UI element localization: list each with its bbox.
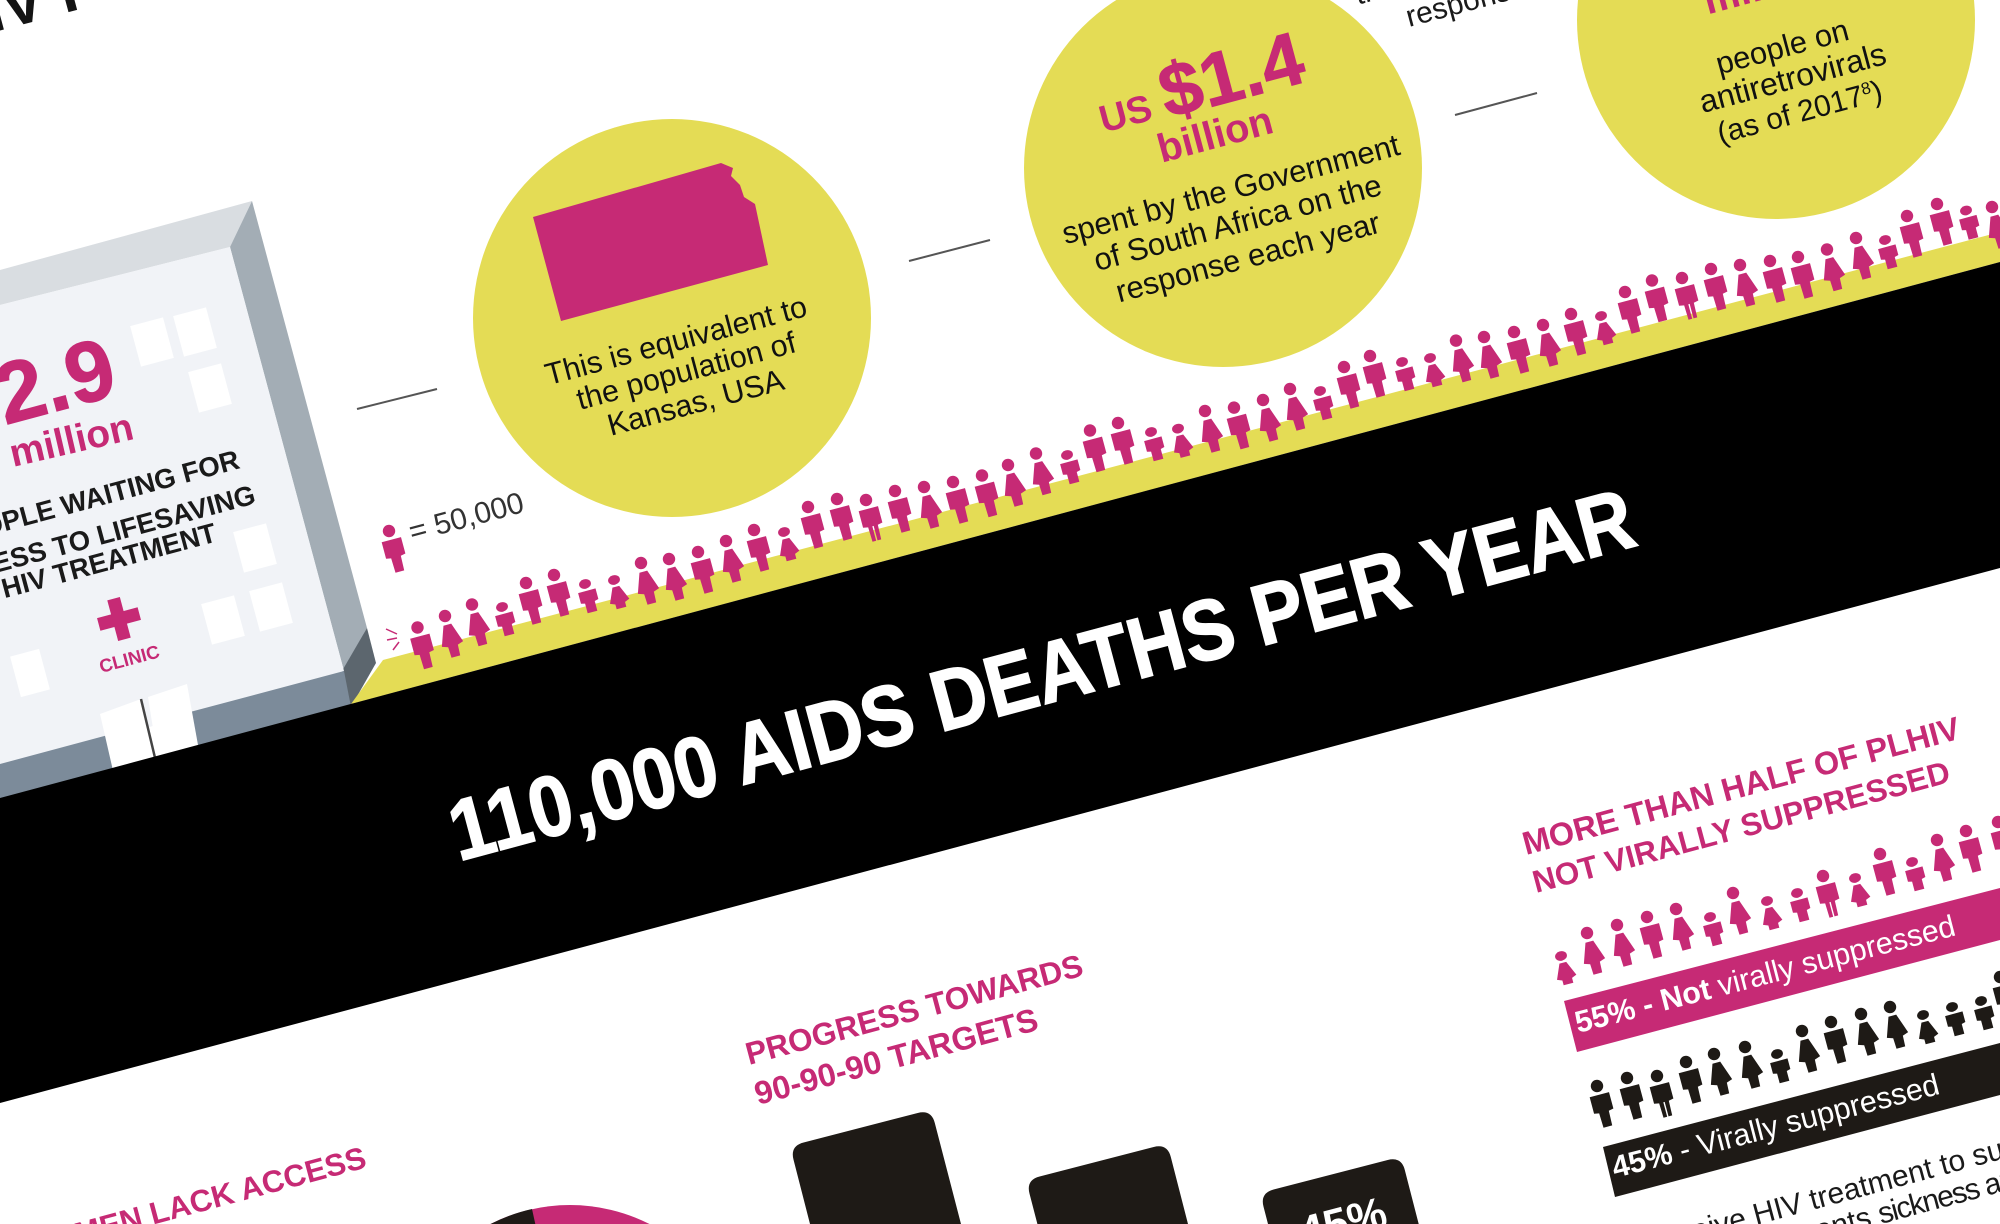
currency prefix: US xyxy=(1095,87,1157,141)
connector dashes xyxy=(357,93,1537,409)
people row: yearly deaths xyxy=(406,195,2000,671)
illustration: clinic building xyxy=(0,201,376,802)
clinic text: HIV TREATMENT xyxy=(0,517,220,604)
band title: 110,000 AIDS DEATHS PER YEAR xyxy=(439,470,1645,880)
heading: viral suppression: NOT VIRALLY SUPPRESSED xyxy=(1528,754,1954,900)
people row: not suppressed xyxy=(1550,813,2000,987)
yellow ground strip xyxy=(351,232,2000,704)
spending caption xyxy=(1058,127,1422,319)
icon: Kansas map xyxy=(533,163,768,321)
antiretrovirals caption: (as of 2017 xyxy=(1714,80,1867,150)
black band xyxy=(0,262,2000,1103)
legend: one figure equals 50,000 xyxy=(378,486,527,574)
antiretrovirals caption: antiretrovirals xyxy=(1695,35,1890,120)
Kansas caption xyxy=(541,289,827,455)
antiretrovirals caption: ) xyxy=(1868,75,1886,109)
icon: medical cross xyxy=(93,593,145,645)
spending caption: of South Africa on the xyxy=(1090,167,1385,278)
bar: 55 percent not suppressed: 55% - Not virally suppressed xyxy=(1571,909,1959,1040)
spending caption: response each year xyxy=(1112,205,1384,309)
start burst marks xyxy=(386,629,399,650)
heading: viral suppression: MORE THAN HALF OF PLHIV xyxy=(1518,710,1964,862)
heading: progress towards targets: PROGRESS TOWARDS xyxy=(741,947,1087,1072)
Kansas caption: Kansas, USA xyxy=(604,363,788,443)
legend: one figure equals 50,000: = 50,000 xyxy=(405,486,527,549)
antiretrovirals caption: people on xyxy=(1712,12,1852,81)
clinic sign: CLINIC xyxy=(97,641,162,677)
stat label: million: million xyxy=(5,406,137,476)
people row: suppressed xyxy=(1586,968,2000,1129)
circle: people on antiretrovirals xyxy=(1577,0,1975,219)
bar: 45 percent suppressed xyxy=(1603,1043,2000,1197)
heading: progress towards targets: 90-90-90 TARGETS xyxy=(750,1001,1042,1112)
unit: billion xyxy=(1153,98,1278,171)
Kansas caption: This is equivalent to xyxy=(541,289,811,392)
spending caption: spent by the Government xyxy=(1058,127,1404,251)
bar: 45 percent suppressed: 45% - Virally suppressed xyxy=(1608,1068,1943,1185)
antiretrovirals caption xyxy=(1687,5,1899,153)
antiretrovirals caption: 8 xyxy=(1859,78,1873,99)
pie chart xyxy=(490,1205,650,1224)
amount: $1.4 xyxy=(1150,15,1313,134)
bar chart: 90-90-90 progress xyxy=(793,1112,1419,1224)
Kansas caption: the population of xyxy=(573,325,800,417)
circle: Kansas comparison xyxy=(473,119,871,517)
circle: government spending xyxy=(1024,0,1422,367)
